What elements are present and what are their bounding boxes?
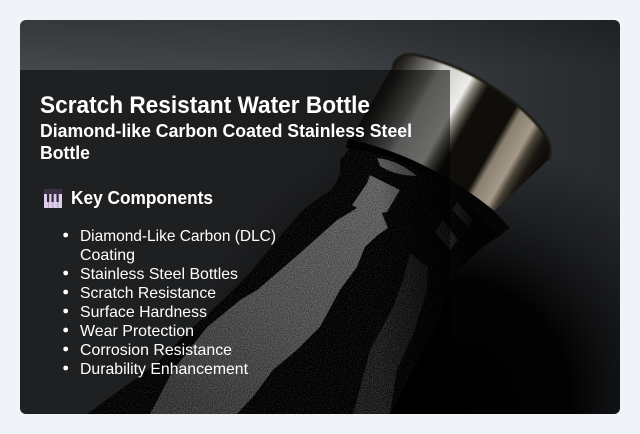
list: key components: Wear Protection <box>80 323 194 340</box>
image: cap rim shading <box>393 54 550 160</box>
list: key components: Durability Enhancement <box>80 361 249 378</box>
title: Scratch Resistant Water Bottle <box>40 92 370 119</box>
list: key components: Corrosion Resistance <box>80 342 232 359</box>
list: key components: Scratch Resistance <box>80 285 216 302</box>
small neck reflections <box>435 202 473 250</box>
list: key components: Coating <box>80 247 135 264</box>
list: key components: Surface Hardness <box>80 304 207 321</box>
list: key components: Stainless Steel Bottles <box>80 266 238 283</box>
subtitle: Diamond-like Carbon Coated Stainless Steel <box>40 121 412 141</box>
list: key components: Diamond-Like Carbon (DLC) <box>80 228 276 245</box>
body highlight band <box>150 175 400 414</box>
image: coated bottle body <box>87 148 505 414</box>
image: steel bottle cap <box>350 54 550 212</box>
neck oval highlight <box>377 158 417 176</box>
heading: key components: Key Components <box>71 188 213 208</box>
image: black neck ring <box>346 139 510 236</box>
list: key components <box>63 228 276 378</box>
secondary dim band <box>353 253 428 414</box>
panel: translucent text overlay <box>20 70 450 414</box>
body right-side shadow <box>388 160 505 386</box>
subtitle <box>40 121 412 163</box>
icon: piano keys <box>44 189 62 208</box>
subtitle: Bottle <box>40 143 90 163</box>
